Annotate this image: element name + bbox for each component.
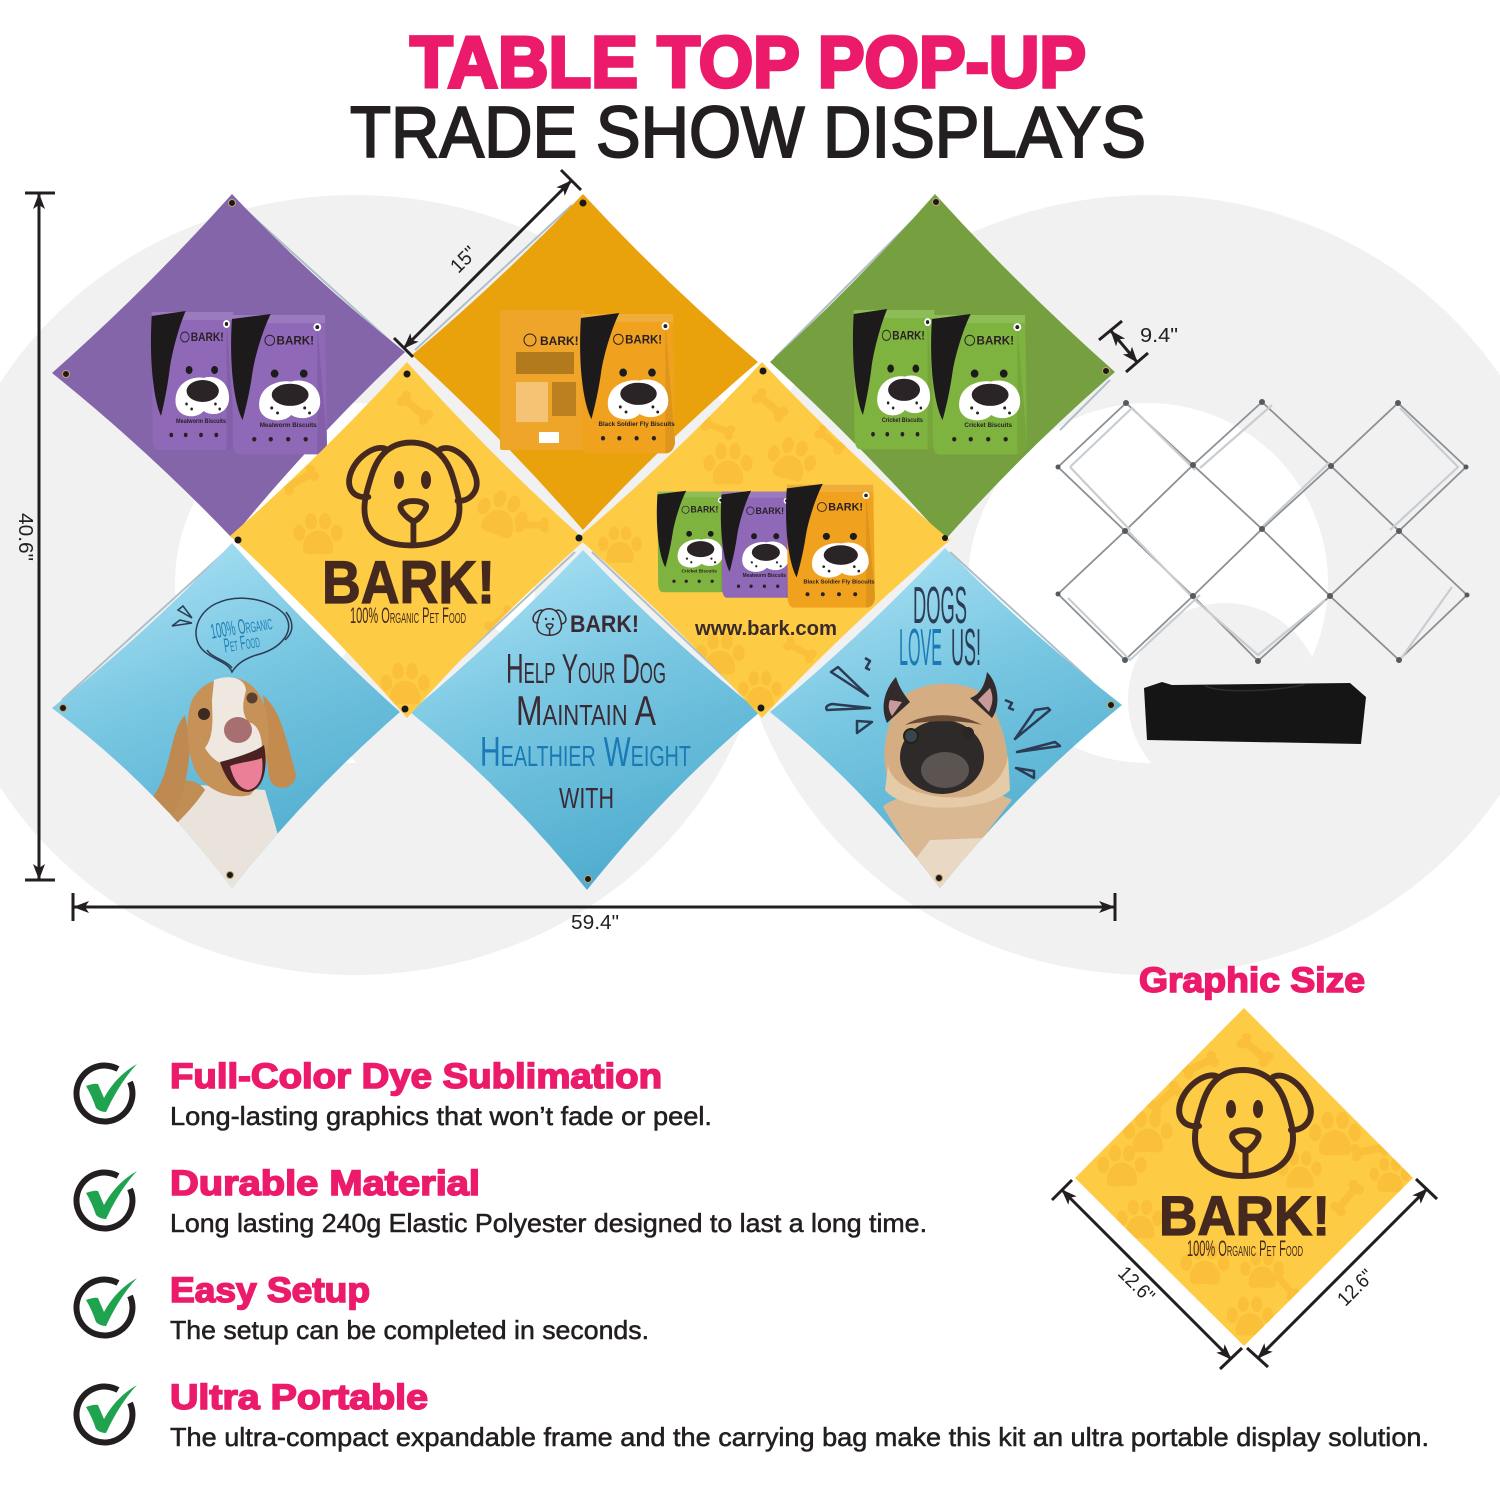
- purple pouch: Mealworm Biscuits: [743, 573, 786, 579]
- message text: with: [559, 770, 614, 817]
- title: TABLE TOP POP-UP: [410, 23, 1086, 103]
- feature: full-color dye sublimation: Full-Color Dye Sublimation: [170, 1057, 662, 1096]
- panel: blue banner with message: [410, 550, 760, 890]
- frame poles behind the banners: [62, 205, 1110, 700]
- panel: yellow banner with products: [576, 362, 950, 718]
- icon: check mark: [76, 1278, 137, 1336]
- purple pouch right: [231, 314, 327, 454]
- dimension: height 40.6: 40.6": [14, 513, 36, 561]
- title: TRADE SHOW DISPLAYS: [350, 93, 1146, 173]
- purple pouch right: Mealworm Biscuits: [260, 422, 317, 429]
- photo: pug: [883, 672, 1012, 895]
- panel: blue banner with pug: [770, 548, 1122, 895]
- feature: ultra portable: [76, 1378, 1429, 1452]
- green pouch left: BARK!: [892, 330, 925, 343]
- dimension: 9.4 inch: [1099, 321, 1178, 372]
- green pouch right: [931, 314, 1027, 454]
- orange pouch: BARK!: [828, 502, 863, 514]
- dimension: graphic left 12.6: [1052, 1180, 1242, 1369]
- carrying bag: [1144, 682, 1366, 744]
- purple pouch left: [151, 311, 235, 450]
- feature: full-color dye sublimation: Long-lasting graphics that won’t fade or peel.: [170, 1101, 712, 1131]
- panel: green banner: [770, 194, 1115, 540]
- dimension: graphic left 12.6: 12.6": [1113, 1262, 1159, 1308]
- dimension: height 40.6: [14, 193, 55, 880]
- purple pouch right: BARK!: [277, 333, 314, 347]
- bark wordmark: 100% Organic Pet Food: [1187, 1236, 1303, 1261]
- orange pouch: [786, 484, 875, 608]
- orange pouch: Black Soldier Fly Biscuits: [803, 580, 875, 586]
- orange pouch front: BARK!: [625, 332, 662, 346]
- green pouch left: Cricket Biscuits: [882, 418, 924, 424]
- orange pouch back: BARK!: [540, 334, 579, 348]
- dog logo: [349, 443, 477, 545]
- feature: easy setup: [76, 1271, 649, 1345]
- graphic size heading: Graphic Size: [1139, 961, 1365, 1000]
- speech bubble: Pet Food: [222, 630, 261, 657]
- dimension: 15 inch: 15": [446, 242, 482, 278]
- dogs love us text: [899, 577, 981, 677]
- feature: durable material: Durable Material: [170, 1164, 480, 1203]
- green pouch: BARK!: [691, 505, 718, 515]
- graphic size panel: [1075, 1008, 1413, 1346]
- panel: blue banner with beagle: [52, 543, 400, 895]
- panel: blue banner with pug: US!: [951, 619, 981, 677]
- bark wordmark: 100% Organic Pet Food: [350, 603, 466, 628]
- panel: orange banner: [412, 194, 758, 530]
- panel: blue banner with pug: DOGS: [913, 577, 967, 635]
- green pouch left: [853, 309, 936, 449]
- website: www.bark.com: [694, 618, 837, 640]
- feature: durable material: Long lasting 240g Elastic Polyester designed to last a long time.: [170, 1208, 927, 1238]
- purple pouch left: BARK!: [191, 331, 224, 344]
- dimension: graphic right 12.6: 12.6": [1333, 1265, 1379, 1311]
- dimension: graphic right 12.6: [1247, 1179, 1437, 1367]
- green pouch right: BARK!: [977, 333, 1014, 347]
- sparks: [826, 658, 1060, 778]
- dog logo: [1179, 1070, 1311, 1176]
- message text: Maintain A: [516, 687, 656, 734]
- feature: full-color dye sublimation: [76, 1057, 712, 1131]
- green pouch: [657, 491, 728, 592]
- message text: [480, 645, 691, 817]
- icon: check mark: [76, 1064, 137, 1122]
- collapsible aluminium frame: [1056, 399, 1470, 664]
- title: [350, 23, 1146, 173]
- green pouch: Cricket Biscuits: [682, 568, 717, 573]
- purple pouch left: Mealworm Biscuits: [176, 419, 227, 425]
- small bark logo: BARK!: [570, 611, 639, 638]
- feature: durable material: [76, 1164, 927, 1238]
- icon: check mark: [76, 1385, 137, 1443]
- bark wordmark: BARK!: [322, 549, 495, 616]
- orange pouch front: [580, 313, 675, 453]
- feature: ultra portable: Ultra Portable: [170, 1378, 428, 1417]
- orange pouch back: [500, 310, 584, 450]
- green pouch right: Cricket Biscuits: [964, 422, 1012, 429]
- panel: yellow banner with logo: [230, 362, 585, 718]
- purple pouch: BARK!: [756, 506, 784, 516]
- feature: easy setup: Easy Setup: [170, 1271, 370, 1310]
- message text: Healthier Weight: [480, 728, 691, 775]
- panel: purple banner: [52, 194, 405, 538]
- small bark logo: [533, 609, 639, 638]
- background logo shapes: [0, 195, 1500, 975]
- speech bubble: 100% Organic: [209, 611, 274, 644]
- orange pouch front: Black Soldier Fly Biscuits: [599, 421, 675, 428]
- dimension: width 59.4: [73, 893, 1115, 934]
- dimension: 15 inch: [394, 170, 581, 357]
- dimension: 9.4 inch: 9.4": [1140, 325, 1178, 347]
- photo: beagle: [153, 677, 296, 895]
- bark wordmark: BARK!: [1159, 1184, 1330, 1247]
- icon: check mark: [76, 1171, 137, 1229]
- message text: Help Your Dog: [506, 645, 666, 692]
- purple pouch: [721, 491, 794, 598]
- feature: ultra portable: The ultra-compact expandable frame and the carrying bag make this kit an ultra portable display solution.: [170, 1422, 1429, 1452]
- feature: easy setup: The setup can be completed in seconds.: [170, 1315, 649, 1345]
- dogs love us text: LOVE: [899, 619, 942, 677]
- dimension: width 59.4: 59.4": [571, 912, 619, 934]
- speech bubble: [172, 598, 292, 672]
